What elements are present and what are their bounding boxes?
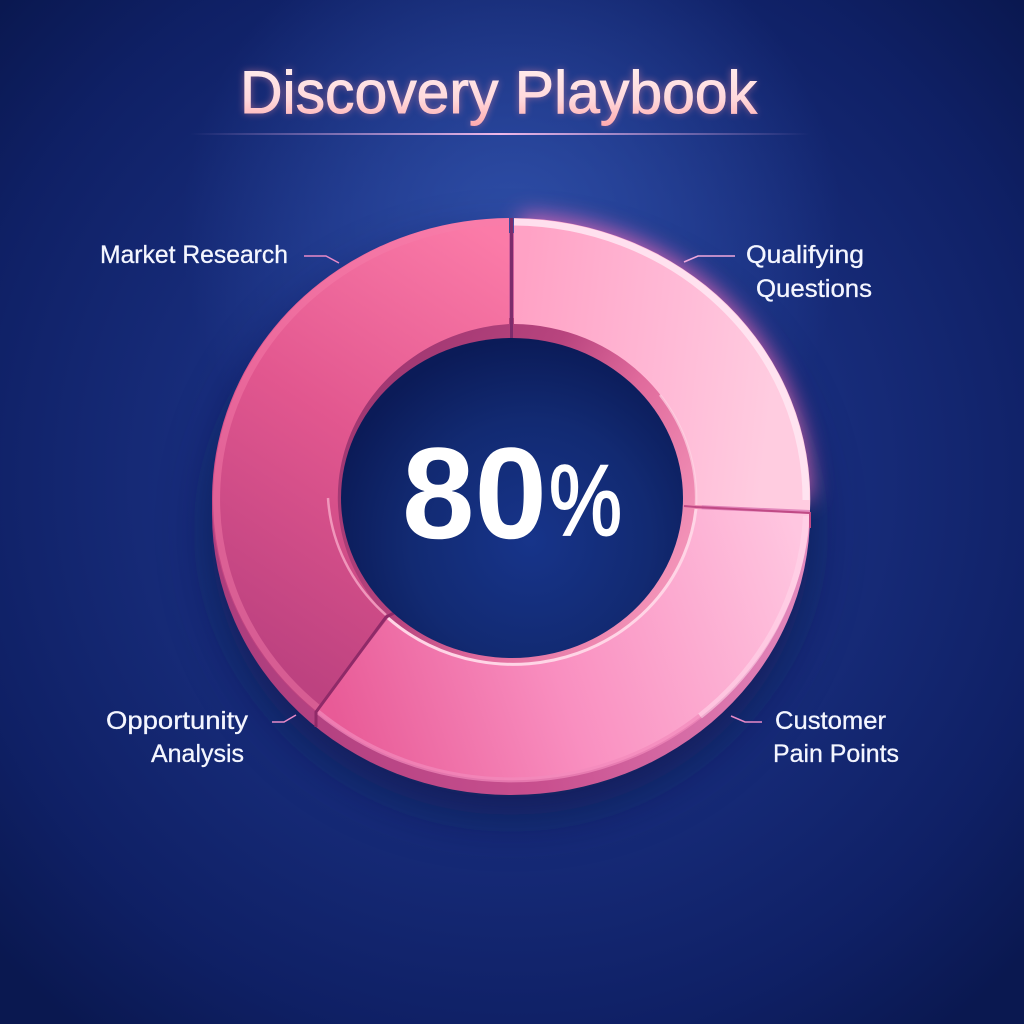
label: Customer Pain Points: [731, 707, 899, 768]
leader: Customer Pain Points: [731, 716, 762, 722]
pink glow: [520, 214, 812, 500]
label: Customer Pain Points: Customer: [775, 707, 886, 735]
title: Discovery Playbook: [240, 59, 758, 126]
donut chart: [211, 214, 812, 815]
leader: Opportunity Analysis: [272, 715, 296, 722]
label: Market Research: Market Research: [100, 241, 288, 269]
divider right: [684, 506, 810, 528]
title: Discovery Playbook: [240, 59, 758, 126]
rim highlight lower right: [700, 516, 806, 716]
center value: %: [549, 445, 622, 557]
segment: Market Research: [212, 218, 509, 712]
leader: Market Research: [304, 256, 339, 263]
divider bottom-left: [316, 610, 400, 727]
segment: Qualifying Questions: [514, 218, 810, 510]
rim highlight left: [217, 222, 508, 708]
center value: 80: [402, 420, 547, 566]
ring side wall: [212, 233, 810, 795]
label: Opportunity Analysis: [106, 707, 296, 768]
background top glow: [150, 0, 874, 560]
inner highlight right: [660, 395, 696, 505]
chart shadow: [211, 245, 811, 815]
label: Qualifying Questions: [684, 241, 872, 303]
center hole: [341, 338, 683, 658]
label: Customer Pain Points: Pain Points: [773, 740, 899, 768]
divider top: [510, 218, 513, 338]
leader: Qualifying Questions: [684, 256, 735, 262]
rim highlight bottom: [318, 712, 700, 780]
label: Qualifying Questions: Qualifying: [746, 241, 864, 269]
outer rim highlight: [514, 222, 806, 500]
label: Opportunity Analysis: Opportunity: [106, 707, 249, 735]
center value: [402, 420, 622, 566]
inner wall: [322, 318, 702, 678]
title underline: [190, 133, 810, 135]
inner highlight left: [328, 498, 386, 615]
segment: Customer Pain Points: [316, 509, 810, 780]
label: Qualifying Questions: Questions: [756, 275, 872, 303]
label: Opportunity Analysis: Analysis: [151, 740, 244, 768]
inner highlight line: [388, 509, 696, 664]
